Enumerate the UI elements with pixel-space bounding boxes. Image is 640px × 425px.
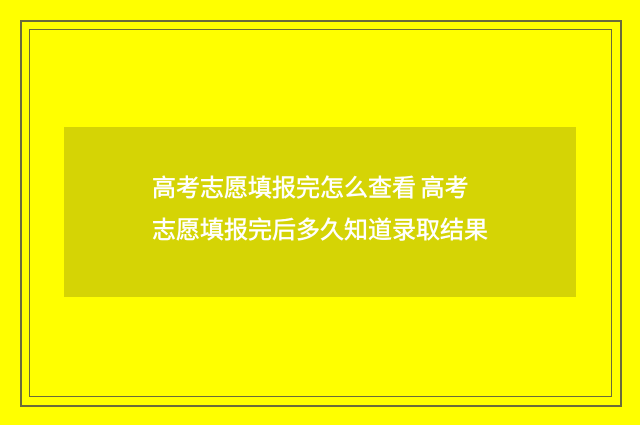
title text: 志愿填报完后多久知道录取结果: [152, 217, 488, 244]
panel: title background: [64, 127, 576, 297]
inner frame border: [29, 29, 612, 397]
title text: 高考志愿填报完怎么查看 高考: [152, 175, 469, 202]
title text: [152, 175, 488, 244]
